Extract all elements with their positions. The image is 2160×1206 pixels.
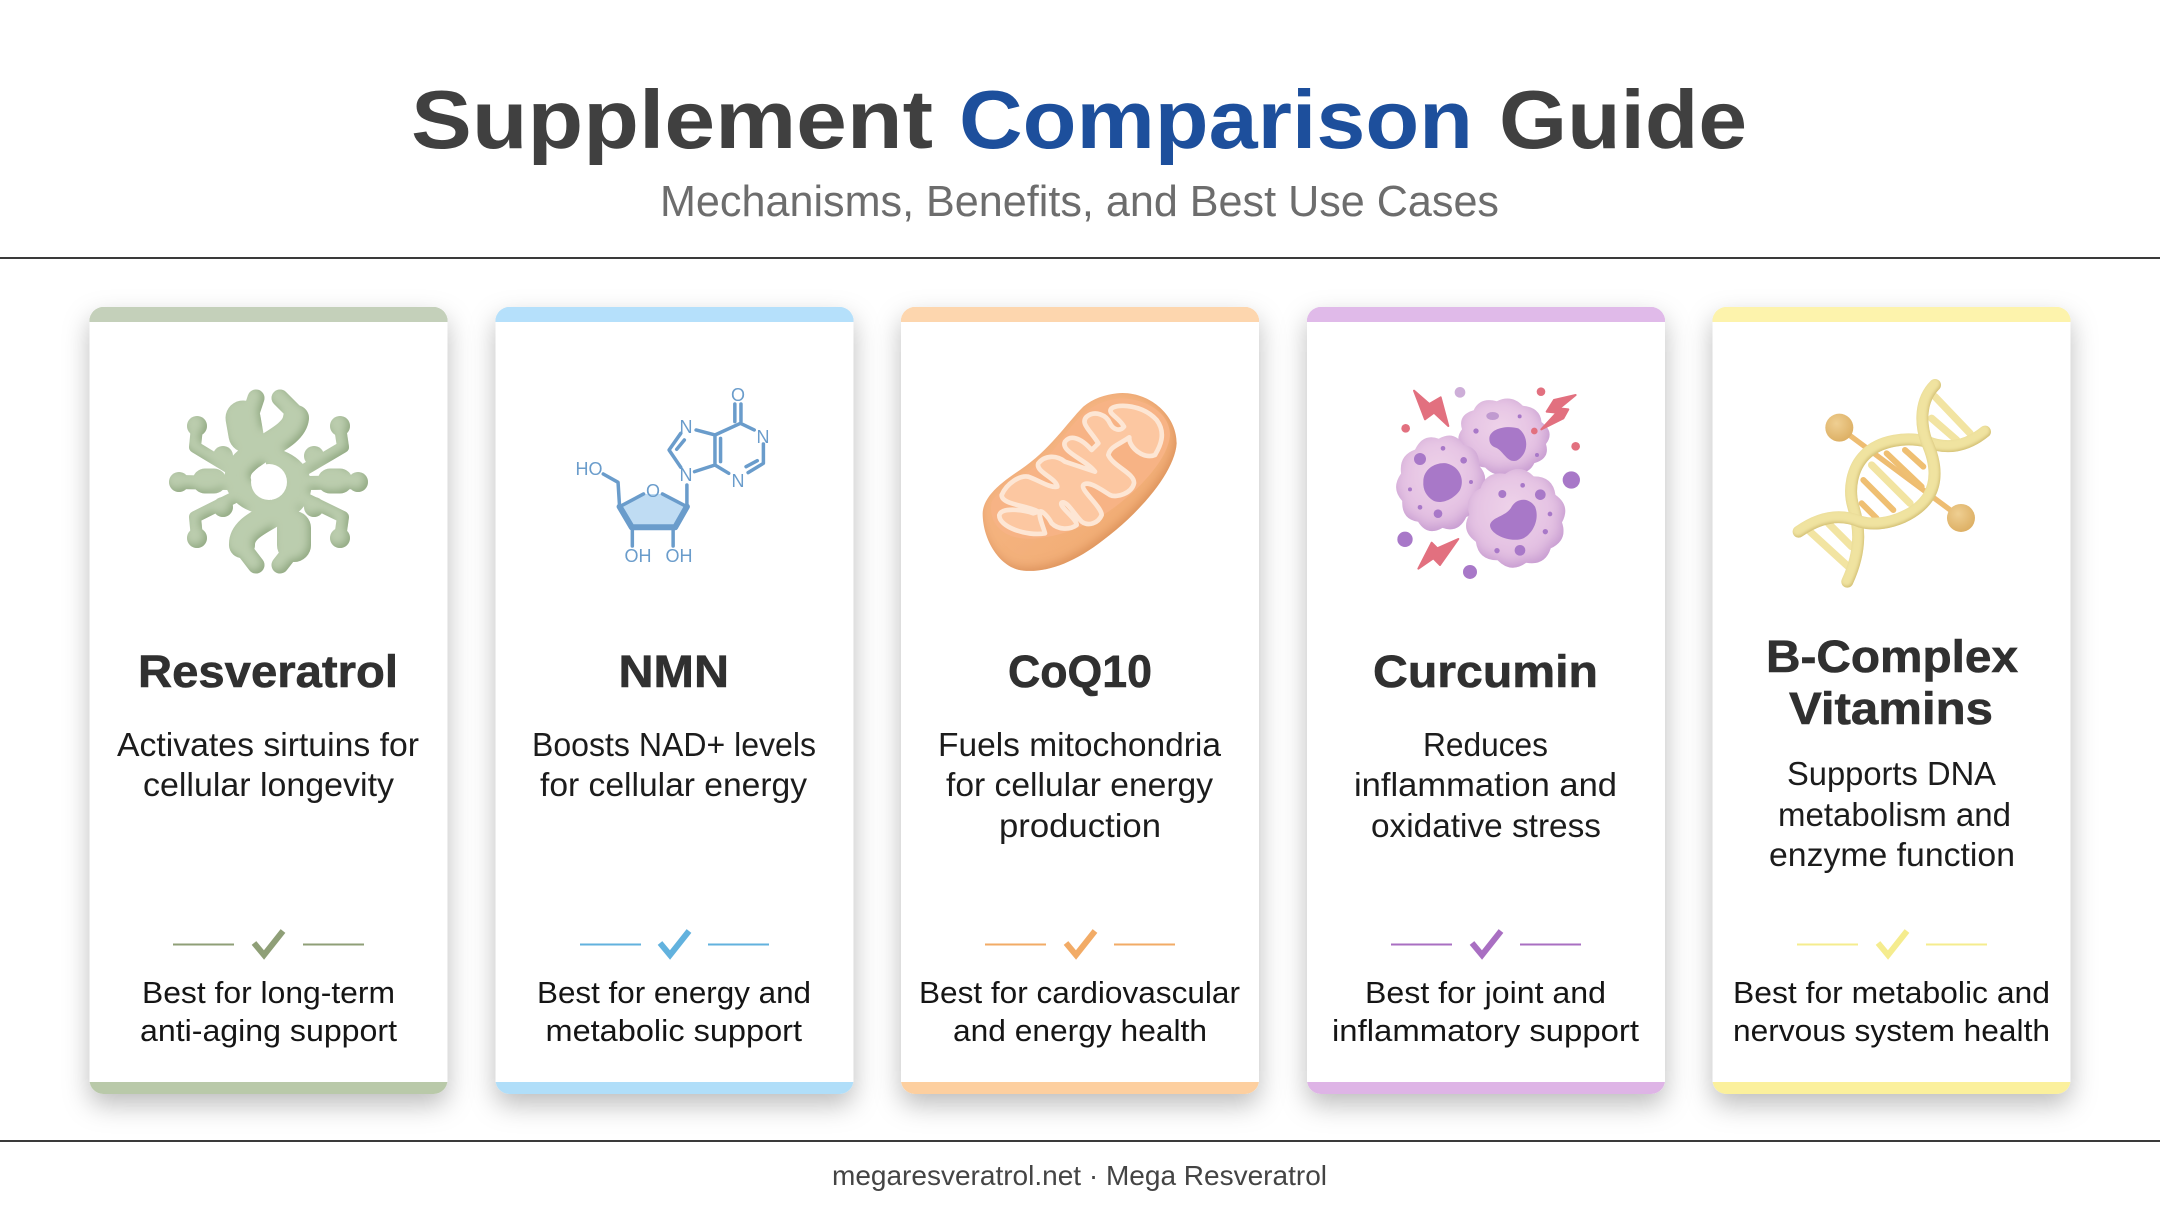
divider with check [1797, 931, 1987, 955]
description [117, 726, 419, 803]
divider with check [1391, 931, 1581, 955]
description [938, 726, 1222, 844]
card body [90, 307, 448, 1094]
icon: resveratrol molecule [169, 398, 368, 565]
description: production [999, 807, 1161, 844]
best for: Best for energy and [537, 975, 811, 1010]
description: oxidative stress [1371, 807, 1601, 844]
name: Vitamins [1789, 683, 1993, 734]
best for: Best for joint and [1365, 975, 1606, 1010]
best for [1733, 975, 2050, 1048]
description: Reduces [1423, 726, 1548, 763]
description [1354, 726, 1617, 844]
icon: NMN molecule: N [680, 417, 692, 437]
footer: megaresveratrol.net · Mega Resveratrol [832, 1160, 1327, 1191]
title: Supplement [411, 73, 933, 166]
best for: Best for cardiovascular [919, 975, 1240, 1010]
description [532, 726, 816, 803]
description: Supports DNA [1787, 755, 1996, 792]
description: for cellular energy [946, 766, 1214, 803]
title: Comparison [959, 73, 1473, 166]
description [1769, 755, 2015, 873]
description: Fuels mitochondria [938, 726, 1222, 763]
icon: NMN molecule: N [680, 465, 692, 485]
divider with check [580, 931, 769, 955]
name: CoQ10 [1008, 646, 1152, 697]
card body [496, 307, 854, 1094]
best for: inflammatory support [1332, 1013, 1639, 1048]
icon: NMN molecule: O [646, 481, 660, 501]
description: inflammation and [1354, 766, 1617, 803]
divider with check [985, 931, 1175, 955]
best for [919, 975, 1240, 1048]
description: for cellular energy [540, 766, 808, 803]
best for [1332, 975, 1639, 1048]
icon: NMN molecule: HO [576, 459, 602, 479]
card body [1307, 307, 1665, 1094]
name: B-Complex [1766, 631, 2018, 682]
best for: and energy health [953, 1013, 1207, 1048]
panel: NMN [496, 307, 854, 1094]
icon: NMN molecule [576, 385, 770, 566]
name: NMN [618, 646, 729, 697]
name: Resveratrol [138, 646, 398, 697]
panel: Resveratrol [90, 307, 448, 1094]
best for: Best for metabolic and [1733, 975, 2050, 1010]
panel: CoQ10 [901, 307, 1259, 1094]
best for [140, 975, 397, 1048]
name: Curcumin [1373, 646, 1598, 697]
title [411, 73, 1747, 166]
icon: mitochondrion [983, 393, 1177, 571]
card body [1712, 307, 2070, 1094]
card body [901, 307, 1259, 1094]
best for: anti-aging support [140, 1013, 397, 1048]
best for [537, 975, 811, 1048]
icon: NMN molecule: OH [666, 546, 692, 566]
description: Boosts NAD+ levels [532, 726, 816, 763]
subtitle: Mechanisms, Benefits, and Best Use Cases [660, 177, 1499, 226]
icon: NMN molecule: N [756, 427, 770, 447]
best for: metabolic support [546, 1013, 802, 1048]
divider with check [173, 931, 364, 955]
best for: Best for long-term [142, 975, 395, 1010]
description: Activates sirtuins for [117, 726, 419, 763]
icon: NMN molecule: N [732, 471, 744, 491]
icon: inflamed cells [1387, 387, 1580, 579]
title: Guide [1499, 73, 1747, 166]
name [1766, 631, 2018, 734]
icon: NMN molecule: O [731, 385, 745, 405]
icon: DNA helix [1799, 385, 1985, 582]
icon: NMN molecule: OH [624, 546, 652, 566]
description: cellular longevity [143, 766, 395, 803]
description: metabolism and [1778, 796, 2011, 833]
description: enzyme function [1769, 836, 2015, 873]
panel: Curcumin [1307, 307, 1665, 1094]
best for: nervous system health [1733, 1013, 2050, 1048]
panel: B-Complex Vitamins [1712, 307, 2070, 1094]
